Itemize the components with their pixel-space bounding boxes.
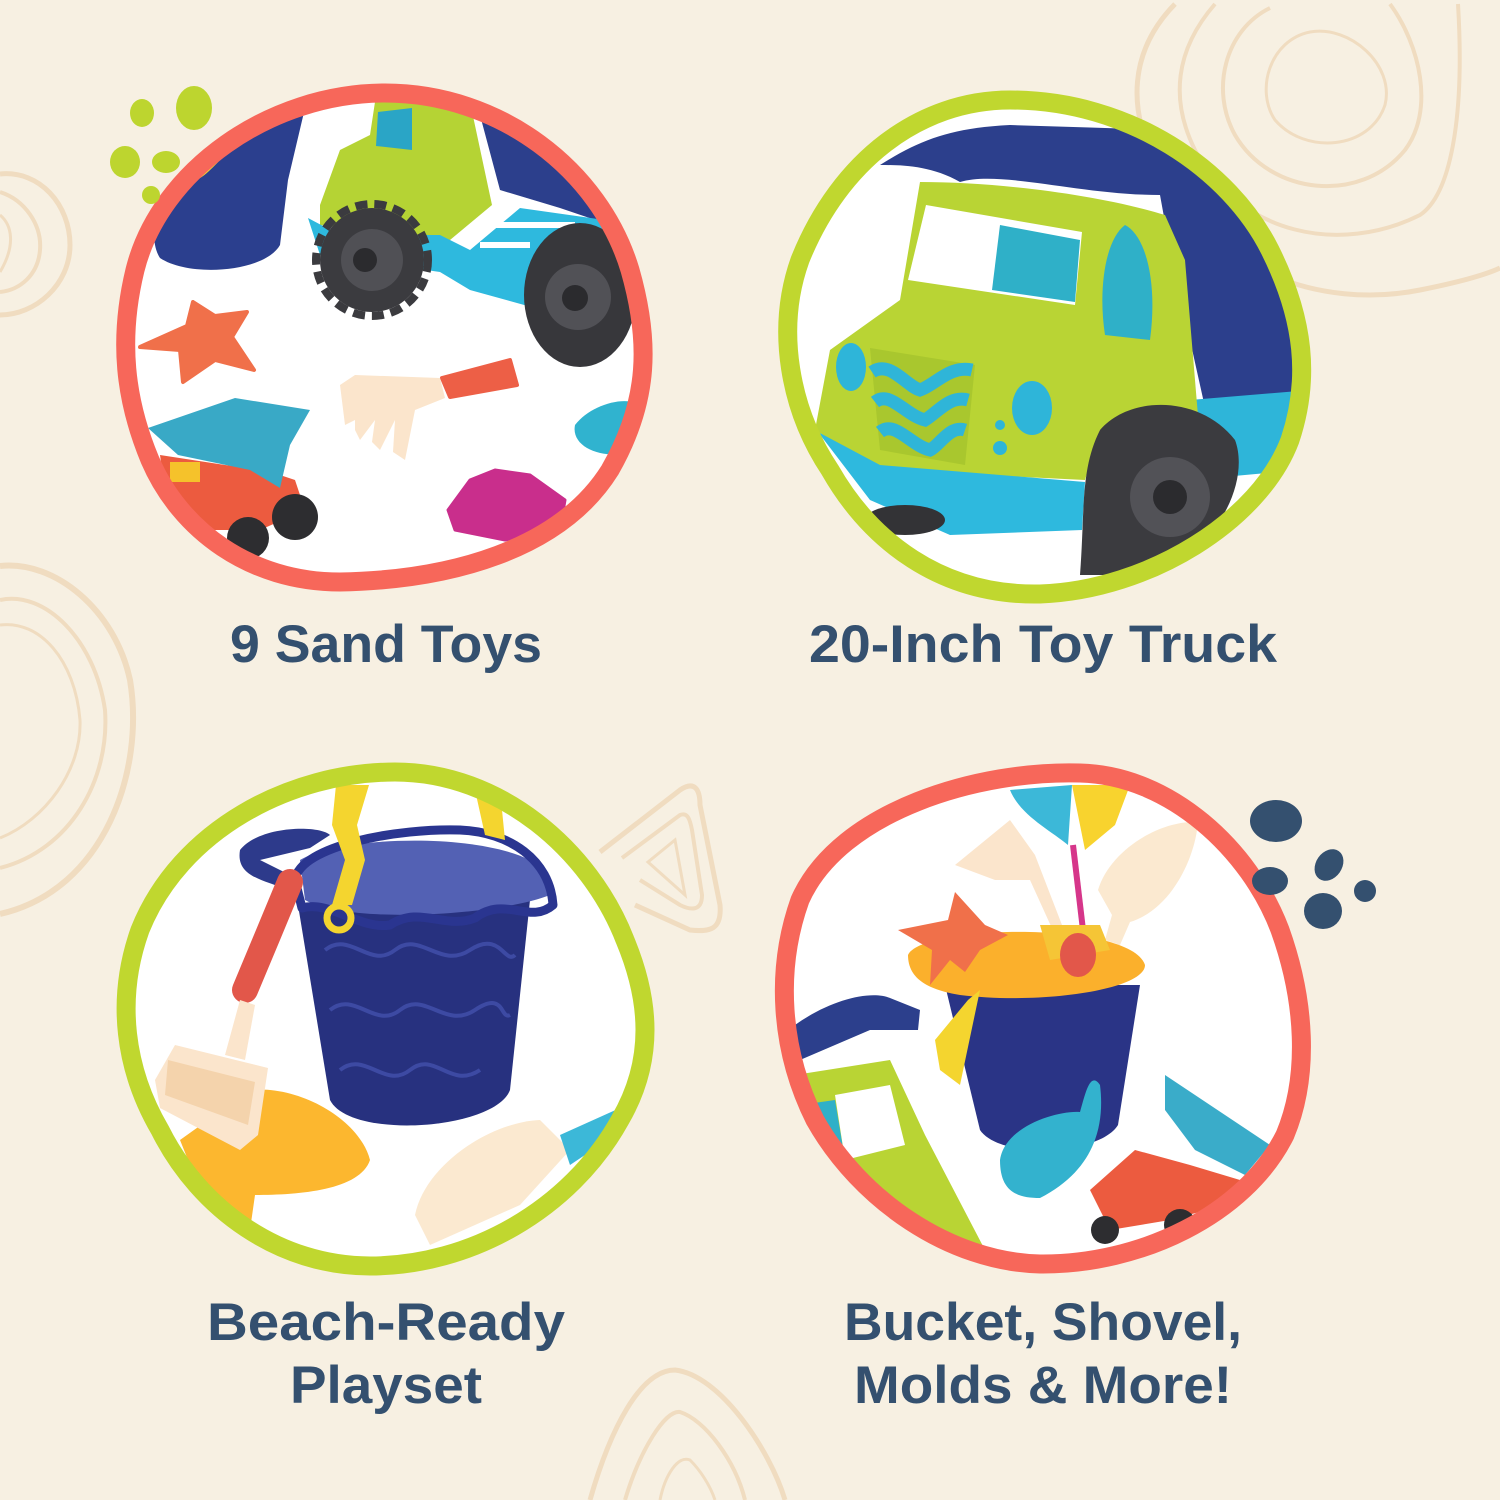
pink crab mold xyxy=(448,470,565,540)
photo area: sand toys xyxy=(135,102,634,572)
truck chassis xyxy=(308,208,603,306)
dump bed xyxy=(880,125,1292,399)
truck dump bed xyxy=(482,122,596,219)
truck lower left xyxy=(795,995,985,1250)
chassis grid xyxy=(480,225,575,245)
whale mold xyxy=(1000,1080,1101,1198)
heading line 2: Molds & More! xyxy=(854,1356,1232,1415)
toy: blue bucket xyxy=(154,108,305,270)
front wheel left xyxy=(865,505,945,535)
interior xyxy=(992,225,1080,302)
heading line 2: Playset xyxy=(290,1356,482,1415)
headlights xyxy=(836,343,866,391)
coral ring xyxy=(126,93,643,582)
heading: Beach-Ready xyxy=(207,1293,566,1352)
bucket rim xyxy=(295,830,553,926)
small dump truck xyxy=(148,398,318,559)
front wheel xyxy=(316,204,428,316)
panel: bucket, shovel, molds xyxy=(770,760,1376,1415)
cab window xyxy=(376,108,412,150)
bumper xyxy=(818,432,1085,535)
heading: Bucket, Shovel, xyxy=(844,1293,1242,1352)
panel: 9 sand toys xyxy=(100,80,660,674)
rake handle xyxy=(155,882,290,1150)
photo area: bucket and tools xyxy=(136,782,636,1256)
yellow handle xyxy=(327,785,505,930)
windshield xyxy=(908,205,1082,305)
starfish xyxy=(140,302,254,382)
lime ring xyxy=(788,100,1302,594)
main wheel xyxy=(1080,405,1239,575)
panel: beach-ready playset xyxy=(110,760,660,1415)
bucket texture xyxy=(325,944,515,1076)
bucket rim highlight xyxy=(200,161,220,178)
pinwheel xyxy=(1010,785,1130,930)
heading: 9 Sand Toys xyxy=(230,615,542,674)
navy dots xyxy=(1250,800,1376,929)
side window xyxy=(1102,225,1152,340)
handle links xyxy=(935,990,980,1085)
chassis rear xyxy=(1196,392,1291,476)
starfish xyxy=(898,892,1008,985)
grille xyxy=(870,348,975,465)
bucket xyxy=(908,925,1145,1150)
rake xyxy=(955,820,1062,935)
bucket xyxy=(240,829,553,1125)
photo area: truck close-up xyxy=(797,110,1292,584)
panel: 20-inch toy truck xyxy=(770,90,1310,674)
bucket side handle xyxy=(240,828,330,885)
photo area: full set xyxy=(770,760,1320,1275)
yellow mold xyxy=(180,1090,370,1230)
small truck xyxy=(1090,1075,1270,1244)
coral ring xyxy=(784,773,1301,1264)
blue mold xyxy=(574,401,628,454)
truck cab xyxy=(320,102,492,240)
red tip xyxy=(1060,933,1096,977)
lime ring xyxy=(126,772,645,1266)
lime dots xyxy=(110,86,212,204)
cab xyxy=(815,182,1200,480)
rake xyxy=(340,360,517,460)
heading: 20-Inch Toy Truck xyxy=(809,615,1278,674)
shovel xyxy=(1098,822,1198,945)
bucket interior xyxy=(300,841,550,915)
scoop xyxy=(415,1108,620,1245)
rear wheel xyxy=(524,223,636,367)
